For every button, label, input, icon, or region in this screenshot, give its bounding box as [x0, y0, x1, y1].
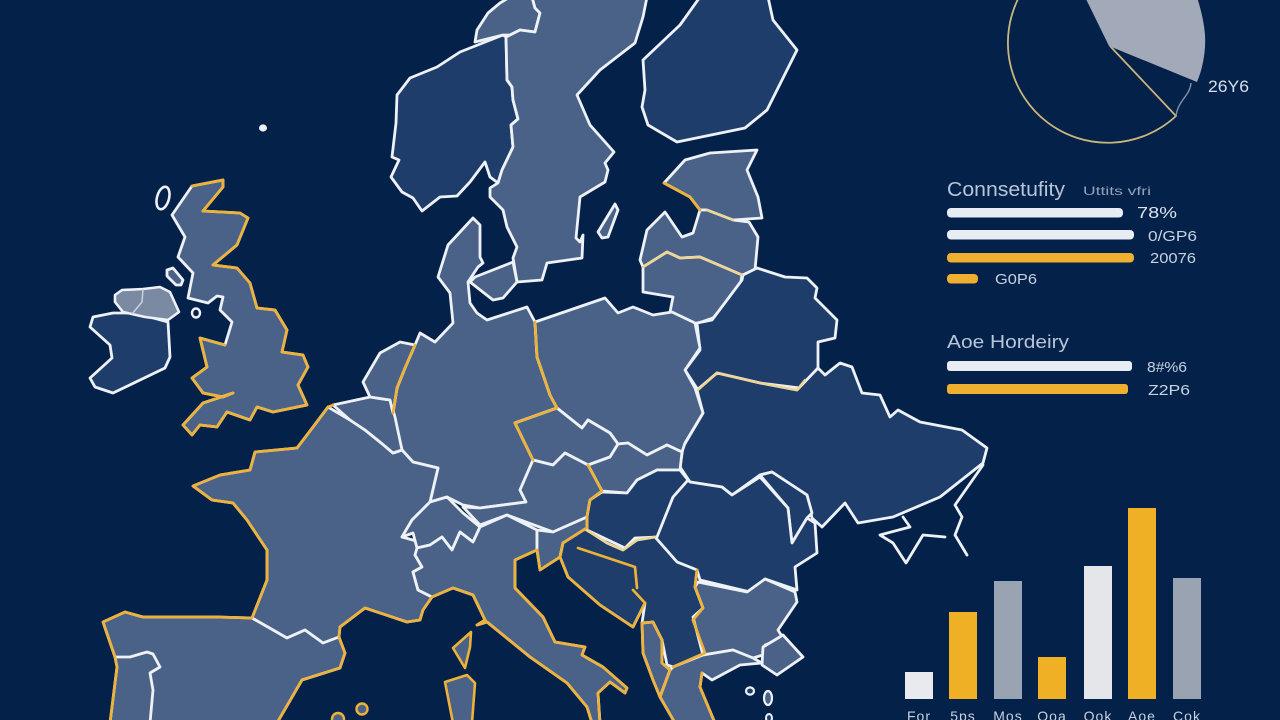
country: Ireland [90, 313, 170, 393]
country: Poland [535, 298, 703, 455]
value 5: 8#%6 [1147, 359, 1187, 376]
country: France [193, 407, 438, 643]
column 1 [905, 672, 933, 699]
country: Denmark islands [470, 262, 517, 300]
country: Romania [655, 477, 817, 592]
islands: Scottish isles [154, 124, 267, 318]
value 6: Z2P6 [1148, 382, 1190, 399]
bar 3 [947, 253, 1134, 262]
pie label: 26Y6 [1208, 77, 1249, 96]
country: Slovenia [537, 517, 587, 570]
country: Latvia [640, 210, 758, 275]
country: Bulgaria [693, 579, 797, 658]
islands: Mediterranean [332, 632, 772, 720]
bar 2 [947, 230, 1134, 240]
country: Lithuania [643, 252, 742, 325]
column 6 [1128, 508, 1156, 699]
country: Turkey in Europe [762, 635, 803, 675]
country: Great Britain [172, 180, 308, 435]
heading: age: Aoe Hordeiry [947, 332, 1069, 352]
island: Gotland [598, 204, 618, 238]
country: Estonia [664, 150, 762, 220]
country: Sweden [490, 0, 647, 282]
country: Italy [413, 515, 627, 720]
country: Greece [660, 650, 762, 720]
sub-heading: Uttits vfri [1083, 184, 1151, 198]
country: Austria [463, 453, 602, 532]
column 4 [1038, 657, 1066, 699]
value 3: 20076 [1150, 250, 1196, 267]
country: Spain [103, 612, 345, 720]
country: Czechia [515, 408, 618, 465]
value 2: 0/GP6 [1148, 228, 1197, 245]
pie chart [1008, 0, 1249, 143]
value 4: G0P6 [995, 271, 1037, 288]
panel: connectivity bars [947, 179, 1197, 288]
border: Portugal [115, 652, 160, 720]
country: Ukraine [680, 363, 987, 527]
country: Switzerland [402, 497, 480, 550]
country: Germany [393, 218, 557, 508]
bar 4 [947, 274, 978, 284]
country: Norway [391, 35, 518, 211]
country: Belgium [333, 397, 402, 453]
map of Europe [90, 0, 987, 720]
value 1: 78% [1137, 205, 1177, 222]
Northern Ireland [115, 287, 179, 320]
gold coast and border highlights [103, 180, 805, 720]
pie connector [1176, 83, 1191, 116]
bar 5 [947, 361, 1132, 371]
country: Netherlands [363, 342, 415, 413]
column 7 [1173, 578, 1201, 699]
bar 1 [947, 208, 1123, 218]
Crimea and Azov coast [880, 465, 983, 563]
pie outline [1008, 0, 1176, 143]
country: northern Norway [475, 0, 540, 42]
column labels [907, 708, 1201, 720]
column 5 [1084, 566, 1112, 699]
panel: age bars [947, 332, 1190, 399]
column 3 [994, 581, 1022, 699]
bar 6 [947, 384, 1128, 394]
country: Finland [642, 0, 797, 142]
country: Hungary [587, 470, 688, 548]
heading: connectivity: Connsetufity [947, 179, 1065, 201]
column 2 [949, 612, 977, 699]
country: Albania [642, 622, 670, 697]
country: Croatia, Bosnia and Serbia [560, 529, 705, 667]
country: Slovakia [588, 443, 682, 493]
country: Moldova [760, 472, 812, 543]
bar chart [905, 508, 1201, 720]
country: Belarus [685, 268, 837, 390]
pie slice [1085, 0, 1205, 82]
